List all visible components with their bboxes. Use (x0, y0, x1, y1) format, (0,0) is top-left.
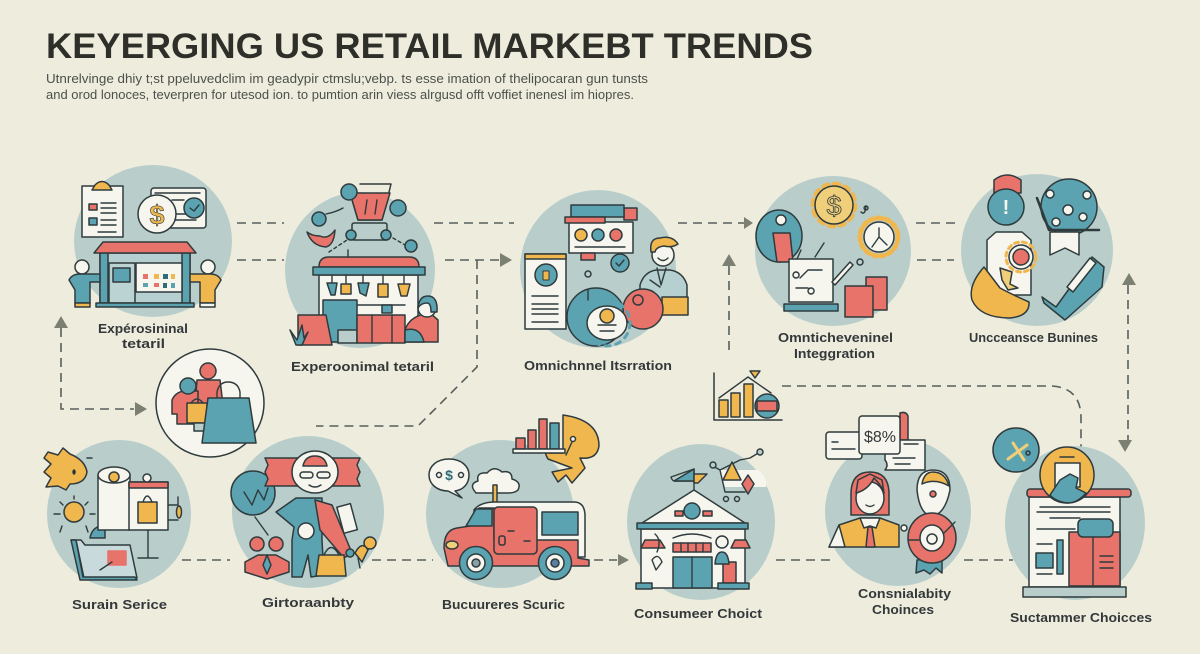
panel: experiential retail 2 (285, 184, 438, 374)
panel: consumer choice (627, 444, 775, 621)
icon: cloud (472, 469, 519, 503)
flow arrows (54, 217, 1136, 566)
label: Surain Serice (72, 597, 167, 612)
label: Uncceansce Bunines (969, 330, 1098, 345)
subtitle text block: and orod lonoces, teverpren for utesod ion. to pumtion arin viess alrgusd offt voffiet inenesl im hiopres. (46, 88, 634, 102)
icon: teal person with card (756, 210, 802, 262)
label (778, 330, 893, 361)
icon: clipboard (82, 182, 123, 237)
label: Consnialabity (858, 586, 952, 601)
label: Expérosininal (98, 321, 188, 336)
icon: speech bubble dollar (429, 459, 469, 498)
icon: shopping cart (329, 184, 417, 252)
title: KEYERGING US RETAIL MARKEBT TRENDS (46, 27, 813, 66)
icon: teal figure (276, 498, 357, 577)
label (98, 321, 188, 351)
icon: customer figures (172, 363, 223, 431)
icon: shopper (405, 296, 438, 342)
icon: price cards: $8% (864, 429, 896, 446)
label: Girtoraanbty (262, 595, 355, 610)
icon: gears and piggy (567, 271, 663, 346)
icon: bar chart and pie (513, 415, 599, 483)
icon: dollar gear: $ (826, 191, 842, 221)
icon: flag (671, 469, 707, 490)
label: Omnichnnel Itsrration (524, 358, 672, 373)
icon: whiteboard (784, 243, 863, 311)
icon: yellow bag and small figure (316, 537, 376, 576)
icon: woman (829, 472, 899, 547)
icon: ribbon and face (265, 451, 360, 493)
icon: cart with goods (710, 449, 766, 502)
label: Consumeer Choict (634, 606, 763, 621)
icon: teal chart bubble (231, 471, 275, 535)
panel: uncertain business (961, 174, 1113, 345)
icon: storefront (636, 490, 750, 589)
panel: business service (426, 415, 599, 612)
icon: dollar gear (813, 184, 855, 226)
panel: customer choices (993, 428, 1152, 625)
icon: growth chart (714, 371, 782, 420)
icon: rosette (901, 513, 956, 574)
icon: mobile card (525, 254, 566, 329)
icon: yellow hand badge (1040, 447, 1094, 503)
label: Bucuureres Scuric (442, 597, 565, 612)
icon: fish and chain (307, 208, 343, 247)
label (858, 586, 952, 617)
icon: paper roll sign (90, 467, 182, 558)
icon: tools badge (993, 428, 1039, 472)
icon: red cards (845, 277, 887, 317)
panel: shoppers circle (156, 349, 264, 457)
icon: alert badge: ! (1003, 197, 1009, 219)
label: tetaril (122, 336, 165, 351)
panel: experiential retail 1 (69, 165, 232, 351)
icon: shopping bag (202, 382, 256, 443)
icon: sun (54, 496, 95, 532)
label: Experoonimal tetaril (291, 359, 434, 374)
subtitle text block: Utnrelvinge dhiy t;st ppeluvedclim im geadypir ctmslu;vebp. ts esse imation of thelipocaran gun tunsts (46, 72, 648, 86)
icon: teal check (1042, 257, 1104, 320)
icon: document with gear (987, 232, 1036, 295)
panel: surain service (44, 440, 191, 612)
label: Integgration (794, 346, 875, 361)
icon: small gear (860, 206, 898, 256)
icon: yellow creature (44, 448, 92, 490)
icon: store (94, 242, 196, 307)
icon: online shop (565, 205, 637, 272)
icon: hand (971, 267, 1029, 318)
icon: dollar card: $ (149, 200, 165, 230)
icon: network laptop (1037, 179, 1099, 255)
label: Choinces (872, 602, 934, 617)
label: Suctammer Choicces (1010, 610, 1152, 625)
label: Omnticheveninel (778, 330, 893, 345)
subtitle text block (46, 72, 648, 102)
icon: person yellow (190, 260, 221, 307)
icon: red couple (245, 537, 289, 579)
panel: consumability choices (825, 412, 971, 617)
icon: van (444, 502, 589, 580)
panel: girtoraanbty (231, 436, 384, 610)
icon: salesperson (640, 237, 688, 315)
panel: omnichannel iteration (520, 190, 688, 373)
icon: price cards (826, 412, 925, 470)
icon: folder laptop (71, 540, 137, 580)
panel: omnichannel integration (755, 176, 911, 361)
icon: document (1023, 489, 1131, 597)
icon: dollar card (138, 188, 206, 233)
icon: alert badge (988, 175, 1024, 225)
icon: person teal (69, 260, 100, 307)
icon: speech bubble dollar: $ (445, 467, 453, 483)
icon: clown face (917, 470, 950, 515)
icon: market stall (290, 250, 425, 345)
